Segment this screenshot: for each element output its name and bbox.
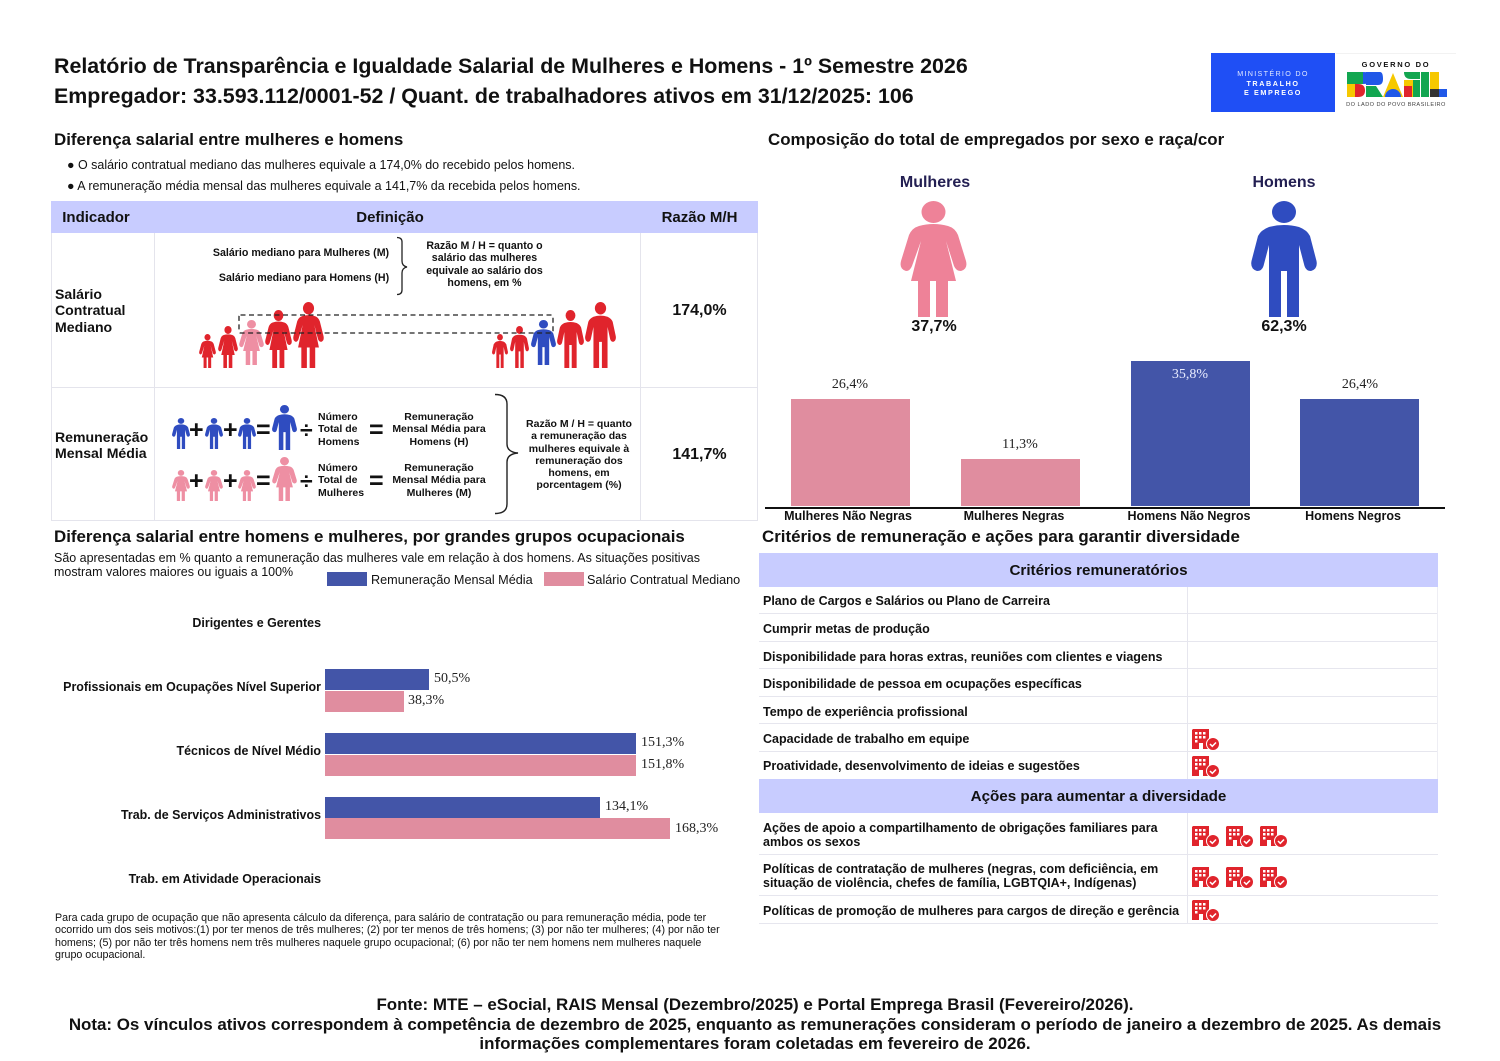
icon: empresa bbox=[1192, 900, 1219, 921]
text: número total mulheres bbox=[318, 462, 364, 499]
text: ÷ bbox=[300, 417, 313, 443]
logo: Ministério do Trabalho e Emprego: TRABALHO bbox=[1246, 79, 1300, 88]
heading: diferença salarial: Diferença salarial entre mulheres e homens bbox=[54, 130, 403, 148]
logo: Ministério do Trabalho e Emprego: MINISTÉRIO DO bbox=[1237, 69, 1309, 78]
text: = bbox=[256, 467, 271, 495]
text: razão remuneração: homens, em bbox=[548, 467, 610, 479]
footnote: Para cada grupo de ocupação que não apresenta cálculo da diferença, para salário de contratação ou para remuneração média, pode ter bbox=[55, 912, 706, 924]
label: Profissionais em Ocupações Nível Superior bbox=[63, 680, 321, 694]
text: explicação: São apresentadas em % quanto a remuneração das mulheres vale em relação à dos homens. As situações positivas bbox=[54, 551, 700, 565]
text: número total mulheres: Mulheres bbox=[318, 487, 364, 499]
value: 35,8% bbox=[1172, 367, 1208, 382]
text: = bbox=[369, 416, 384, 444]
text: razão: equivale ao salário dos bbox=[426, 265, 543, 277]
row: Políticas de contratação de mulheres (negras, com deficiência, em bbox=[763, 862, 1158, 876]
label: Técnicos de Nível Médio bbox=[177, 744, 321, 758]
value: 134,1% bbox=[605, 799, 648, 814]
icon: mulher bbox=[900, 201, 966, 317]
value: 151,8% bbox=[641, 757, 684, 772]
operators women bbox=[189, 467, 384, 495]
row bbox=[759, 724, 1438, 752]
bar Homens Não Negros bbox=[1131, 361, 1250, 506]
label Mulheres: Mulheres bbox=[900, 174, 970, 190]
value: 26,4% bbox=[1342, 377, 1378, 392]
text: remuneração homens: Mensal Média para bbox=[392, 423, 486, 435]
bar bbox=[325, 733, 636, 754]
pictogram: mediana mulheres e homens bbox=[199, 302, 616, 368]
text: salário mediano homens: Salário mediano para Homens (H) bbox=[219, 272, 389, 284]
row bbox=[759, 669, 1438, 697]
text: número total homens: Número bbox=[318, 411, 358, 423]
logo: Governo do Brasil: DO LADO DO POVO BRASILEIRO bbox=[1346, 102, 1446, 108]
title bbox=[54, 54, 968, 108]
value: 168,3% bbox=[675, 821, 718, 836]
row label: salário contratual: Contratual bbox=[55, 302, 125, 318]
column divider top bbox=[1187, 587, 1188, 779]
row: situação de violência, chefes de família, LGBTQIA+, Indígenas) bbox=[763, 876, 1136, 890]
text: razão: salário das mulheres bbox=[432, 252, 537, 264]
header critérios: Critérios remuneratórios bbox=[1009, 562, 1188, 579]
footer: fonte e nota: informações complementares foram coletadas em fevereiro de 2026. bbox=[479, 1034, 1031, 1053]
bar chart: sexo e raça/cor bbox=[765, 361, 1445, 522]
table header bbox=[51, 201, 758, 233]
category label: Mulheres Não Negras bbox=[784, 508, 912, 522]
heading: grupos ocupacionais: Diferença salarial entre homens e mulheres, por grandes grupos ocupacionais bbox=[54, 527, 685, 546]
text: razão remuneração: Razão M / H = quanto bbox=[526, 418, 632, 430]
text: + bbox=[189, 416, 204, 444]
row: Capacidade de trabalho em equipe bbox=[763, 732, 969, 746]
bar bbox=[325, 797, 600, 818]
row bbox=[759, 587, 1438, 614]
text: número total homens bbox=[318, 411, 359, 448]
row label: remuneração: Mensal Média bbox=[55, 445, 147, 461]
bar bbox=[325, 669, 429, 690]
table header: Indicador bbox=[62, 209, 130, 226]
header ações bbox=[759, 779, 1438, 813]
label: Dirigentes e Gerentes bbox=[192, 616, 321, 630]
label Homens: Homens bbox=[1252, 174, 1316, 190]
heading: composição: Composição do total de empregados por sexo e raça/cor bbox=[768, 130, 1224, 148]
legend: Remuneração Mensal Média bbox=[371, 573, 533, 587]
axis bbox=[765, 507, 1445, 508]
value 174,0%: 174,0% bbox=[672, 302, 727, 318]
text: razão remuneração: remuneração dos bbox=[535, 455, 623, 467]
text: ÷ bbox=[300, 468, 313, 494]
panel: tabela indicador bbox=[51, 201, 758, 521]
logo: Ministério do Trabalho e Emprego: E EMPREGO bbox=[1244, 88, 1302, 97]
value 62,3%: 62,3% bbox=[1261, 318, 1307, 335]
pictogram: soma mulheres bbox=[172, 457, 297, 501]
text: remuneração homens: Homens (H) bbox=[410, 436, 468, 448]
text: explicação: mostram valores maiores ou iguais a 100% bbox=[54, 565, 293, 579]
category label: Homens Negros bbox=[1305, 508, 1401, 522]
text: razão remuneração: porcentagem (%) bbox=[536, 479, 622, 491]
operators men bbox=[189, 416, 384, 444]
text: explicação bbox=[54, 551, 700, 579]
text: número total mulheres: Total de bbox=[318, 474, 357, 486]
text: número total mulheres: Número bbox=[318, 462, 358, 474]
row: ambos os sexos bbox=[763, 835, 860, 849]
text: razão bbox=[426, 240, 543, 289]
icon: empresa bbox=[1192, 729, 1219, 750]
text: razão remuneração bbox=[526, 418, 632, 491]
row label: salário contratual: Salário bbox=[55, 286, 102, 302]
text: número total homens: Total de bbox=[318, 423, 357, 435]
row bbox=[759, 855, 1438, 896]
text: remuneração homens bbox=[392, 411, 486, 448]
bar bbox=[325, 755, 636, 776]
logo: Ministério do Trabalho e Emprego bbox=[1211, 53, 1335, 112]
brace bbox=[397, 236, 408, 296]
title: Relatório de Transparência e Igualdade Salarial de Mulheres e Homens - 1º Semestre 2026 bbox=[54, 54, 968, 78]
table header: Definição bbox=[356, 209, 424, 226]
row bbox=[759, 697, 1438, 724]
text: remuneração homens: Remuneração bbox=[404, 411, 474, 423]
icons: empresas contratação bbox=[1192, 867, 1287, 888]
row: Tempo de experiência profissional bbox=[763, 704, 968, 718]
value 37,7%: 37,7% bbox=[911, 318, 957, 335]
value: 26,4% bbox=[832, 377, 868, 392]
panel: critérios table bbox=[759, 553, 1438, 924]
logo: Governo do Brasil: GOVERNO DO bbox=[1362, 60, 1430, 69]
icons: empresas apoio bbox=[1192, 826, 1287, 847]
bar bbox=[325, 818, 670, 839]
footnote: grupo ocupacional. bbox=[55, 949, 145, 961]
text: + bbox=[189, 467, 204, 495]
text: remuneração mulheres: Mensal Média para bbox=[392, 474, 486, 486]
footnote: homens; (5) por não ter três homens nem três mulheres naquele grupo ocupacional; (6) por não ter nem homens nem mulheres naquele bbox=[55, 937, 701, 949]
text: = bbox=[369, 467, 384, 495]
row: Ações de apoio a compartilhamento de obrigações familiares para bbox=[763, 821, 1158, 835]
logo: Governo do Brasil bbox=[1336, 53, 1456, 108]
legend bbox=[327, 572, 740, 587]
label: Trab. em Atividade Operacionais bbox=[129, 872, 321, 886]
header critérios bbox=[759, 553, 1438, 587]
row label: remuneração bbox=[55, 429, 148, 461]
footnote bbox=[55, 912, 720, 961]
legend: Salário Contratual Mediano bbox=[587, 573, 740, 587]
table header: Razão M/H bbox=[662, 209, 737, 226]
bar Mulheres Não Negras bbox=[791, 399, 910, 506]
row bbox=[759, 813, 1438, 855]
value: 38,3% bbox=[408, 693, 444, 708]
row label: salário contratual bbox=[55, 286, 125, 335]
row: Disponibilidade de pessoa em ocupações específicas bbox=[763, 677, 1082, 691]
bar bbox=[325, 691, 404, 712]
row bbox=[759, 614, 1438, 642]
text: razão remuneração: mulheres equivale à bbox=[529, 443, 629, 455]
row: Proatividade, desenvolvimento de ideias e sugestões bbox=[763, 759, 1080, 773]
text: remuneração mulheres: Remuneração bbox=[404, 462, 474, 474]
row: Políticas de promoção de mulheres para cargos de direção e gerência bbox=[763, 904, 1179, 918]
text: + bbox=[223, 467, 238, 495]
label: Trab. de Serviços Administrativos bbox=[121, 808, 321, 822]
row: Cumprir metas de produção bbox=[763, 622, 930, 636]
icon: homem bbox=[1251, 201, 1317, 317]
row: Plano de Cargos e Salários ou Plano de Carreira bbox=[763, 594, 1050, 608]
bullet list: ● O salário contratual mediano das mulheres equivale a 174,0% do recebido pelos homens. bbox=[67, 158, 575, 172]
table frame bbox=[51, 233, 758, 521]
right edge bbox=[1437, 587, 1438, 779]
text: razão: homens, em % bbox=[447, 277, 522, 289]
bullet list: ● A remuneração média mensal das mulheres equivale a 141,7% da recebida pelos homens. bbox=[67, 179, 581, 193]
brace bbox=[495, 394, 518, 514]
icon: empresa bbox=[1192, 756, 1219, 777]
title: Empregador: 33.593.112/0001-52 / Quant. de trabalhadores ativos em 31/12/2025: 106 bbox=[54, 84, 914, 108]
bar chart: grupos ocupacionais bbox=[63, 616, 718, 886]
row bbox=[759, 896, 1438, 924]
value: 151,3% bbox=[641, 735, 684, 750]
value 141,7%: 141,7% bbox=[672, 446, 727, 462]
row label: salário contratual: Mediano bbox=[55, 319, 112, 335]
value: 11,3% bbox=[1002, 437, 1038, 452]
row label: remuneração: Remuneração bbox=[55, 429, 148, 445]
column divider bottom bbox=[1187, 813, 1188, 924]
footer: fonte e nota bbox=[69, 995, 1441, 1053]
text: razão: Razão M / H = quanto o bbox=[426, 240, 543, 252]
row: Disponibilidade para horas extras, reuniões com clientes e viagens bbox=[763, 650, 1162, 664]
text: remuneração mulheres bbox=[392, 462, 486, 499]
bullet list bbox=[67, 158, 581, 193]
category label: Homens Não Negros bbox=[1128, 508, 1250, 522]
row bbox=[759, 642, 1438, 669]
value: 50,5% bbox=[434, 671, 470, 686]
text: + bbox=[223, 416, 238, 444]
text: salário mediano: Salário mediano para Mulheres (M) bbox=[213, 247, 389, 259]
footer: fonte e nota: Fonte: MTE – eSocial, RAIS Mensal (Dezembro/2025) e Portal Emprega Brasil (Fevereiro/2026). bbox=[376, 995, 1134, 1014]
footnote: ocorrido um dos seis motivos:(1) por ter menos de três mulheres; (2) por ter menos de três homens; (3) por não ter mulheres; (4) por não ter bbox=[55, 924, 720, 936]
text: número total homens: Homens bbox=[318, 436, 359, 448]
footer: fonte e nota: Nota: Os vínculos ativos correspondem à competência de dezembro de 2025, enquanto as remunerações consideram o período de janeiro a dezembro de 2025. As demais bbox=[69, 1014, 1441, 1034]
text: remuneração mulheres: Mulheres (M) bbox=[407, 487, 471, 499]
text: razão remuneração: a remuneração das bbox=[531, 430, 627, 442]
pictogram: soma homens bbox=[172, 405, 297, 450]
header ações: Ações para aumentar a diversidade bbox=[971, 788, 1226, 805]
text: = bbox=[256, 416, 271, 444]
bar Homens Negros bbox=[1300, 399, 1419, 506]
heading: critérios: Critérios de remuneração e ações para garantir diversidade bbox=[762, 527, 1240, 546]
category label: Mulheres Negras bbox=[964, 508, 1064, 522]
bar Mulheres Negras bbox=[961, 459, 1080, 506]
